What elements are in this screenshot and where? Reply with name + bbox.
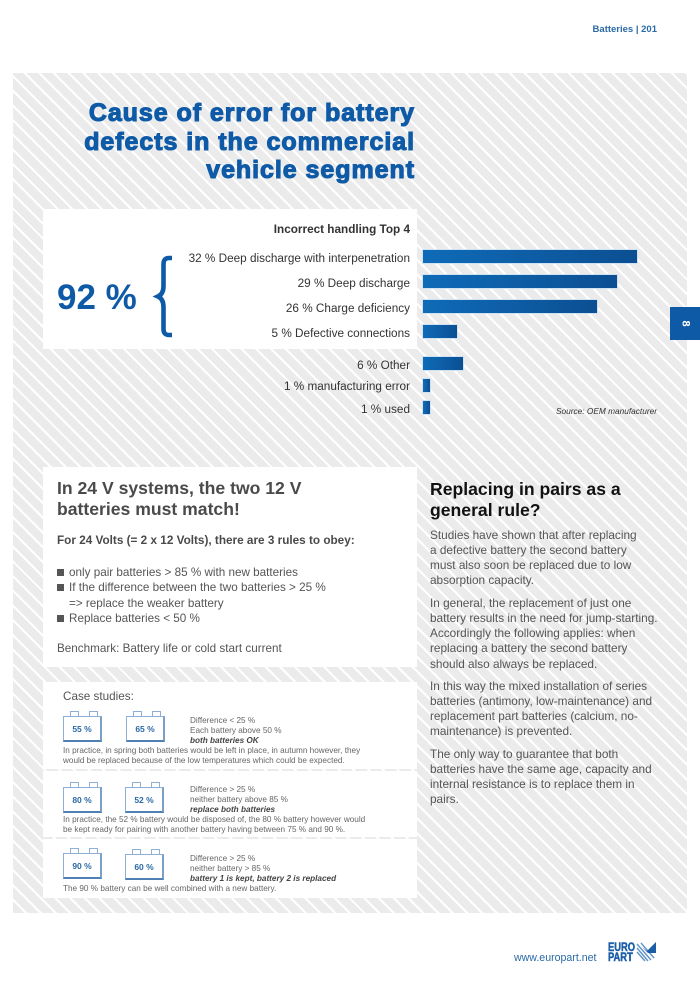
case 1 rule: both batteries OK: [190, 736, 259, 745]
body paragraph 2: replacing a battery the second battery: [430, 641, 627, 655]
body paragraph 4: batteries have the same age, capacity and: [430, 762, 652, 776]
case 3 rule: battery 1 is kept, battery 2 is replaced: [190, 874, 336, 883]
bar chart: [422, 249, 638, 415]
icon: battery 52 %: 52 %: [134, 795, 154, 805]
heading: 24 V systems: [57, 478, 302, 519]
bar label: 6 % Other: [357, 359, 410, 372]
bar label: 26 % Charge deficiency: [286, 302, 410, 315]
page header: Batteries | 201: [593, 24, 657, 35]
body paragraph 1: absorption capacity.: [430, 573, 534, 587]
body paragraph 2: should also always be replaced.: [430, 657, 597, 671]
case studies heading: Case studies:: [63, 690, 134, 703]
title: Cause of error for battery: [89, 99, 415, 127]
logo: [608, 940, 656, 964]
case 3 rule: Difference > 25 %: [190, 854, 255, 863]
case 1 practice note: In practice, in spring both batteries would be left in place, in autumn however, they: [63, 746, 360, 755]
icon: battery 90 %: [63, 853, 102, 879]
big number: 92 %: [57, 278, 137, 317]
source note: Source: OEM manufacturer: [556, 406, 657, 416]
title: defects in the commercial: [84, 128, 415, 156]
case 1 practice note: [63, 746, 360, 765]
body paragraph 1: [430, 528, 637, 587]
bar label: 1 % manufacturing error: [284, 380, 410, 393]
icon: battery 55 %: [63, 716, 102, 742]
heading: replacing in pairs: general rule?: [430, 500, 540, 520]
body paragraph 3: batteries (antimony, low-maintenance) and: [430, 694, 652, 708]
footer url: www.europart.net: [514, 952, 596, 964]
case 1 rule: Each battery above 50 %: [190, 726, 282, 735]
icon: battery 80 %: [63, 787, 102, 813]
case 2 rule: [190, 785, 288, 814]
panel: 24 V rules: [43, 467, 417, 667]
panel: case study 2: [43, 771, 417, 837]
body paragraph 3: In this way the mixed installation of series: [430, 678, 647, 692]
icon: curly brace: [152, 256, 172, 338]
rules list: only pair batteries > 85 % with new batteries: [69, 566, 298, 579]
case 2 rule: neither battery above 85 %: [190, 795, 288, 804]
case 3 practice note: The 90 % battery can be well combined with a new battery.: [63, 884, 276, 893]
case 2 rule: Difference > 25 %: [190, 785, 255, 794]
heading: 24 V systems: batteries must match!: [57, 499, 240, 519]
icon: battery 55 %: 55 %: [72, 724, 92, 734]
body paragraph 1: Studies have shown that after replacing: [430, 528, 637, 542]
case 2 rule: replace both batteries: [190, 805, 275, 814]
case 1 practice note: would be replaced because of the low temperatures which could be expected.: [63, 756, 345, 765]
rules list: [57, 566, 326, 625]
bar label: 5 % Defective connections: [272, 327, 410, 340]
panel: case study 3: [43, 839, 417, 898]
body paragraph 3: [430, 678, 652, 738]
body paragraph 2: Accordingly the following applies: when: [430, 626, 635, 640]
case 2 practice note: [63, 815, 365, 834]
logo wordmark: EURO: [608, 940, 635, 954]
heading: replacing in pairs: Replacing in pairs as a: [430, 479, 621, 499]
icon: battery 60 %: [125, 854, 164, 880]
body paragraph 1: a defective battery the second battery: [430, 543, 627, 557]
logo wordmark: PART: [608, 950, 633, 964]
body paragraph 2: battery results in the need for jump-starting.: [430, 611, 658, 625]
rules list: If the difference between the two batteries > 25 %: [69, 581, 326, 594]
body paragraph 4: pairs.: [430, 792, 459, 806]
case 1 rule: [190, 716, 282, 745]
body paragraph 3: maintenance) is prevented.: [430, 724, 572, 738]
title: vehicle segment: [206, 156, 415, 184]
body paragraph 1: must also soon be replaced due to low: [430, 558, 631, 572]
case 1 rule: Difference < 25 %: [190, 716, 255, 725]
body paragraph 4: internal resistance is to replace them in: [430, 777, 635, 791]
benchmark note: Benchmark: Battery life or cold start current: [57, 642, 282, 655]
logo wordmark: [608, 940, 635, 964]
rules list: => replace the weaker battery: [69, 596, 224, 610]
chart heading: Incorrect handling Top 4: [274, 223, 410, 236]
chapter tab: [670, 307, 700, 340]
case 3 rule: [190, 854, 336, 883]
logo mark: [636, 942, 656, 962]
bar label: 32 % Deep discharge with interpenetration: [189, 252, 410, 265]
body paragraph 4: The only way to guarantee that both: [430, 746, 618, 760]
icon: battery 90 %: 90 %: [72, 861, 92, 871]
icon: battery 65 %: [126, 716, 165, 742]
bar label: 29 % Deep discharge: [298, 277, 410, 290]
body paragraph 2: In general, the replacement of just one: [430, 596, 631, 610]
icon: battery 52 %: [125, 787, 164, 813]
body paragraph 3: replacement part batteries (calcium, no-: [430, 709, 638, 723]
case 2 practice note: In practice, the 52 % battery would be disposed of, the 80 % battery however would: [63, 815, 365, 824]
panel: incorrect handling top 4: [43, 209, 417, 349]
rules intro: For 24 Volts (= 2 x 12 Volts), there are 3 rules to obey:: [57, 534, 355, 547]
chapter tab: 8: [680, 320, 692, 327]
heading: 24 V systems: In 24 V systems, the two 12 V: [57, 478, 301, 498]
icon: battery 60 %: 60 %: [134, 862, 154, 872]
body paragraph 4: [430, 746, 652, 806]
case 2 practice note: be kept ready for pairing with another battery having between 75 % and 90 %.: [63, 825, 345, 834]
body paragraph 2: [430, 596, 658, 671]
case 3 rule: neither battery > 85 %: [190, 864, 270, 873]
bar label: 1 % used: [361, 403, 410, 416]
heading: replacing in pairs: [430, 479, 621, 520]
panel: case study 1: [43, 682, 417, 769]
icon: battery 65 %: 65 %: [135, 724, 155, 734]
rules list: Replace batteries < 50 %: [69, 612, 200, 625]
icon: battery 80 %: 80 %: [72, 795, 92, 805]
title: [84, 99, 415, 184]
